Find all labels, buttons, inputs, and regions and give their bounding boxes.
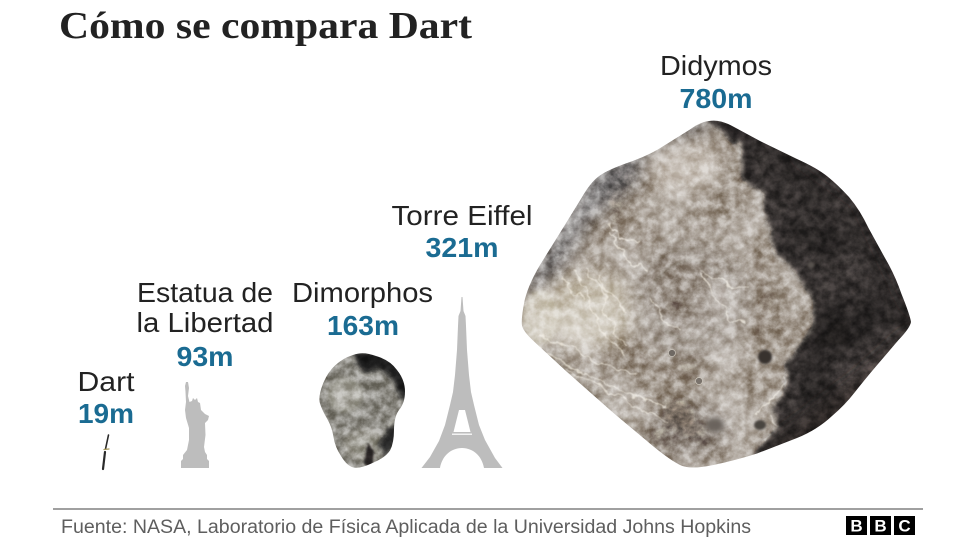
footer rule — [53, 508, 923, 510]
BBC logo: C — [898, 516, 911, 536]
label: Torre Eiffel: 321m — [426, 232, 498, 263]
craters — [758, 350, 772, 364]
label: Dart: Dart — [78, 366, 135, 397]
surface veins — [535, 225, 785, 440]
icon: Dart spacecraft — [103, 435, 109, 469]
title: Cómo se compara Dart — [59, 5, 472, 47]
BBC logo: B — [850, 516, 863, 536]
label: Dart — [78, 366, 135, 429]
icon: Statue of Liberty silhouette — [181, 382, 209, 468]
label: Dimorphos — [292, 277, 433, 341]
label: Estatua de la Libertad: 93m — [176, 341, 234, 372]
label: Torre Eiffel — [392, 200, 532, 263]
BBC logo — [846, 516, 915, 536]
label: Didymos: 780m — [680, 83, 752, 114]
label: Didymos: Didymos — [660, 50, 772, 81]
label: Estatua de la Libertad: Estatua de — [137, 277, 273, 308]
label: Torre Eiffel: Torre Eiffel — [392, 200, 532, 231]
label: Didymos — [660, 50, 772, 114]
source note: Fuente: NASA, Laboratorio de Física Aplicada de la Universidad Johns Hopkins — [61, 517, 751, 538]
label: Estatua de la Libertad: la Libertad — [136, 307, 274, 338]
lit patches — [540, 272, 640, 348]
label: Dimorphos: Dimorphos — [292, 277, 433, 308]
label: Estatua de la Libertad — [136, 277, 274, 372]
label: Dimorphos: 163m — [327, 310, 399, 341]
shaded upper-left rim — [526, 122, 712, 297]
icon: Eiffel Tower silhouette — [422, 297, 502, 468]
label: Dart: 19m — [78, 398, 134, 429]
grain overlays — [515, 115, 915, 475]
icon: Didymos asteroid — [522, 120, 911, 468]
BBC logo: B — [874, 516, 887, 536]
icon: Dimorphos asteroid — [319, 353, 405, 468]
dark hemisphere — [737, 131, 911, 455]
